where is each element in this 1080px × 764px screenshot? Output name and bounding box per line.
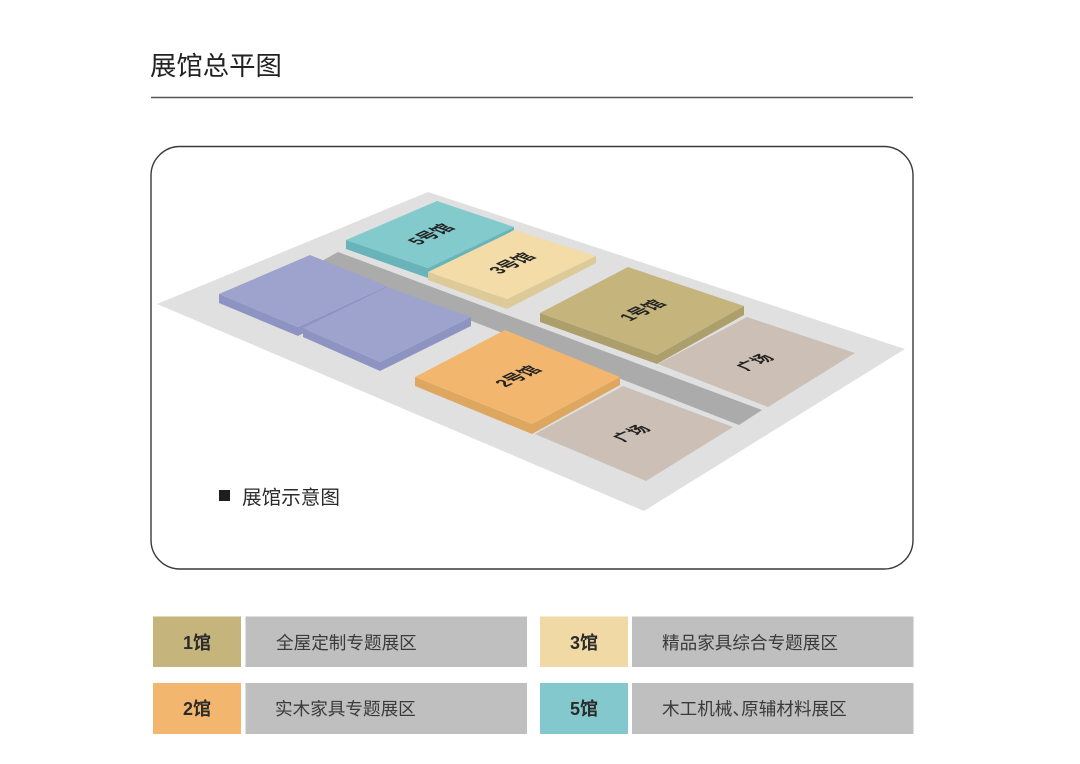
- hall: unlabelled purple A: [219, 255, 387, 336]
- legend: hall 5: 5馆: [570, 698, 598, 719]
- hall 1: 1号馆: [614, 298, 671, 323]
- legend: hall 3: 3馆: [570, 632, 598, 653]
- legend: hall 1: 全屋定制专题展区: [276, 633, 417, 653]
- plaza: upper: 广场: [731, 352, 779, 373]
- legend: hall 3: [540, 616, 914, 667]
- legend: hall 2: [153, 683, 527, 734]
- legend: hall 1: 1馆: [183, 632, 211, 653]
- panel: site plan: [151, 146, 913, 569]
- legend: hall 5: [540, 683, 914, 734]
- plaza: lower: 广场: [607, 423, 656, 444]
- hall: unlabelled purple B: [303, 287, 471, 371]
- legend: hall 3: 精品家具综合专题展区: [662, 633, 838, 653]
- legend: hall 2: 实木家具专题展区: [275, 699, 416, 719]
- plaza: upper: [658, 317, 855, 407]
- hall 3: [428, 230, 596, 309]
- title: 展馆总平图: [150, 51, 282, 81]
- hall 5: 5号馆: [402, 222, 459, 247]
- legend: hall 5: 木工机械、原辅材料展区: [662, 699, 847, 719]
- hall 2: [415, 330, 620, 434]
- hall 5: [346, 201, 514, 278]
- hall 2: 2号馆: [489, 364, 546, 389]
- hall 1: [540, 267, 744, 364]
- road: [320, 252, 762, 425]
- ground: [157, 192, 905, 511]
- hall 3: 3号馆: [483, 251, 540, 276]
- plaza: lower: [535, 386, 733, 481]
- map caption: 展馆示意图: [242, 487, 340, 509]
- legend: hall 2: 2馆: [183, 698, 211, 719]
- legend: hall 1: [153, 616, 527, 667]
